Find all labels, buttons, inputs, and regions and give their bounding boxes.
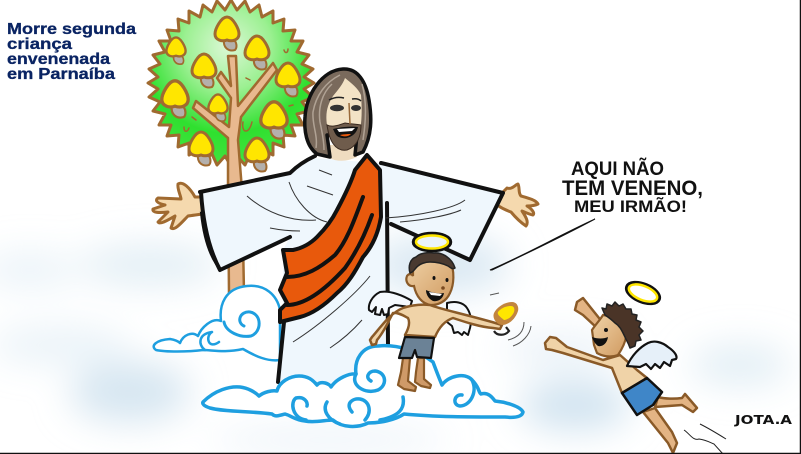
cashew fruits [162,17,300,171]
orange sash [280,155,381,322]
right hand [497,184,538,226]
face [592,328,608,346]
mouth [333,127,358,138]
neck [329,145,357,161]
small cloud, left [154,286,280,360]
flying angel boy [545,279,726,454]
torso and near arm [545,337,647,393]
speech text [562,158,703,216]
motion lines [490,293,531,346]
boy legs [398,358,431,391]
title: criança [7,36,72,53]
hair [305,69,371,157]
boy head [406,256,453,305]
figure of Jesus [153,69,538,395]
blue shorts [622,378,662,415]
title [7,21,136,83]
beard [327,123,361,150]
far arm [575,298,603,328]
boy torso and arms [370,305,502,345]
tree trunk and branches [193,56,277,293]
speech text: AQUI NÃO [571,158,664,180]
cashew tree [148,0,314,293]
boy shorts [399,337,434,358]
speech text: MEU IRMÃO! [574,196,687,216]
left hand [153,183,209,229]
halo [624,279,662,307]
brows [329,97,361,101]
title: em Parnaíba [7,66,115,83]
legs [643,394,697,453]
eyes [330,105,344,111]
motion lines [684,424,726,454]
halo [414,234,450,250]
angel boy holding cashew [369,234,531,391]
head [592,315,626,356]
head of Jesus [305,69,371,161]
tree crown [148,0,314,166]
inner sleeve [201,213,222,268]
speech text: TEM VENENO, [562,177,703,200]
hair strands [313,75,366,150]
white robe [202,158,503,395]
boy face [426,276,448,301]
face [326,78,362,150]
nose [349,103,350,124]
leaf marks [184,49,293,131]
signature: JOTA.A [734,413,793,427]
wing [627,342,677,369]
title: Morre segunda [7,21,136,38]
robe outline [200,156,503,382]
cashew in hand [493,302,518,335]
boy hair [409,253,455,273]
curly hair [602,302,643,348]
wings [369,292,471,335]
robe folds [247,170,465,348]
large cloud, bottom [203,346,523,426]
speech line [490,219,595,270]
title: envenenada [7,51,110,68]
